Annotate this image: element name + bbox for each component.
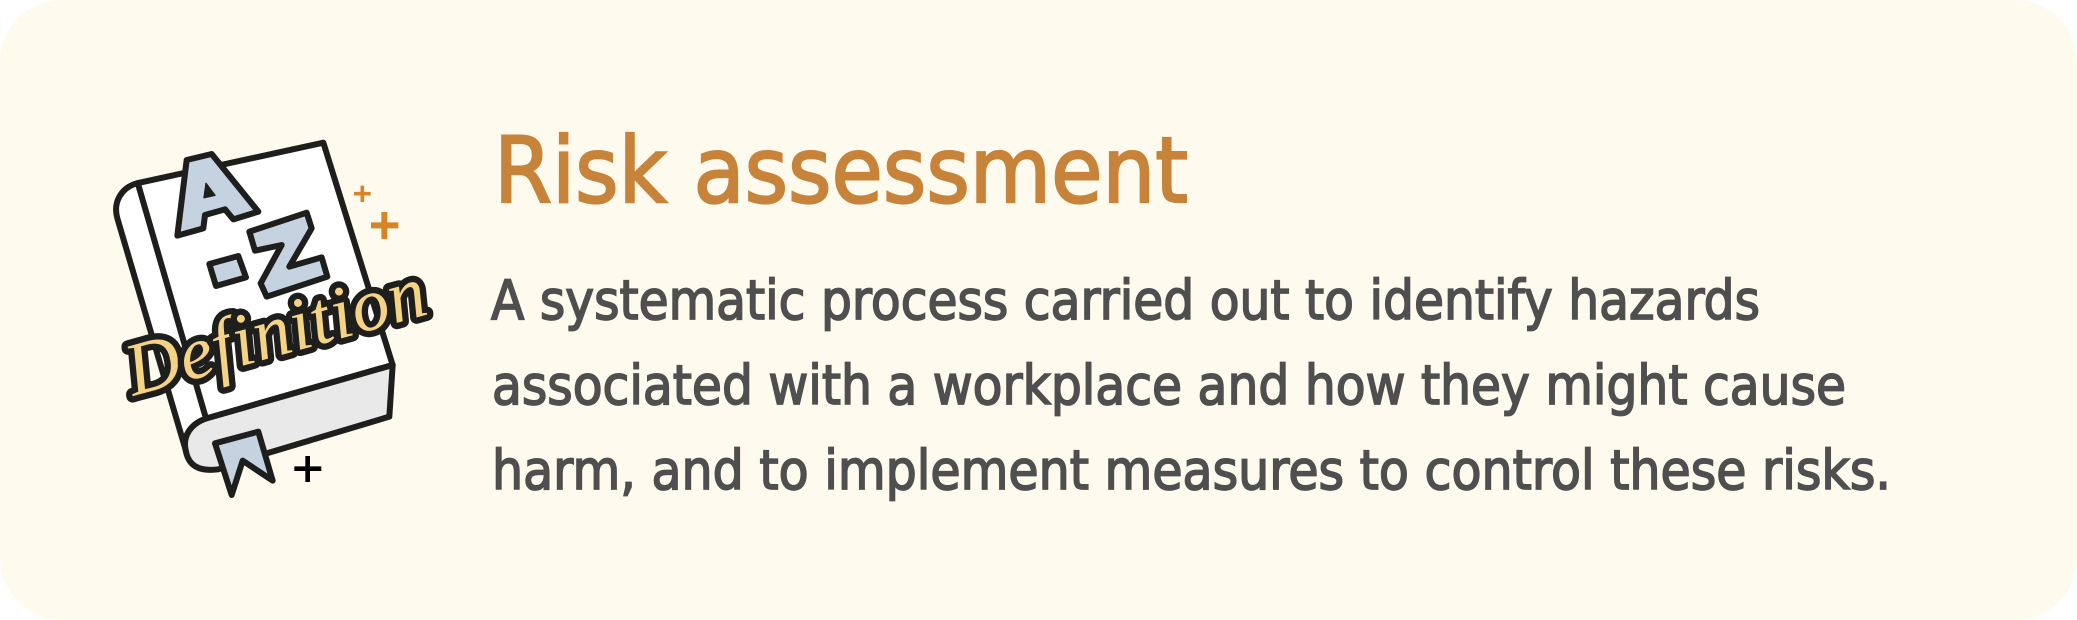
dash between letters bbox=[209, 256, 246, 286]
bookmark ribbon bbox=[215, 432, 273, 495]
icon: definition book bbox=[115, 143, 435, 495]
letter A counter bbox=[204, 183, 215, 198]
book spine line bbox=[138, 185, 205, 415]
book pages cover bbox=[116, 143, 393, 450]
definition text block bbox=[491, 268, 1891, 502]
letter Z bbox=[249, 213, 327, 297]
book page edge bbox=[185, 365, 393, 470]
script label: Definition: Definition bbox=[115, 250, 435, 413]
sparkle: small orange plus bbox=[354, 186, 371, 202]
letter A bbox=[177, 154, 258, 236]
definition line 3: harm, and to implement measures to control these risks. bbox=[492, 438, 1891, 502]
definition line 2: associated with a workplace and how they might cause bbox=[492, 353, 1846, 417]
definition line 1: A systematic process carried out to identify hazards bbox=[491, 268, 1760, 332]
sparkle: black plus bbox=[294, 456, 321, 482]
sparkle: large orange plus bbox=[371, 212, 398, 239]
title: Risk assessment bbox=[494, 119, 1188, 224]
